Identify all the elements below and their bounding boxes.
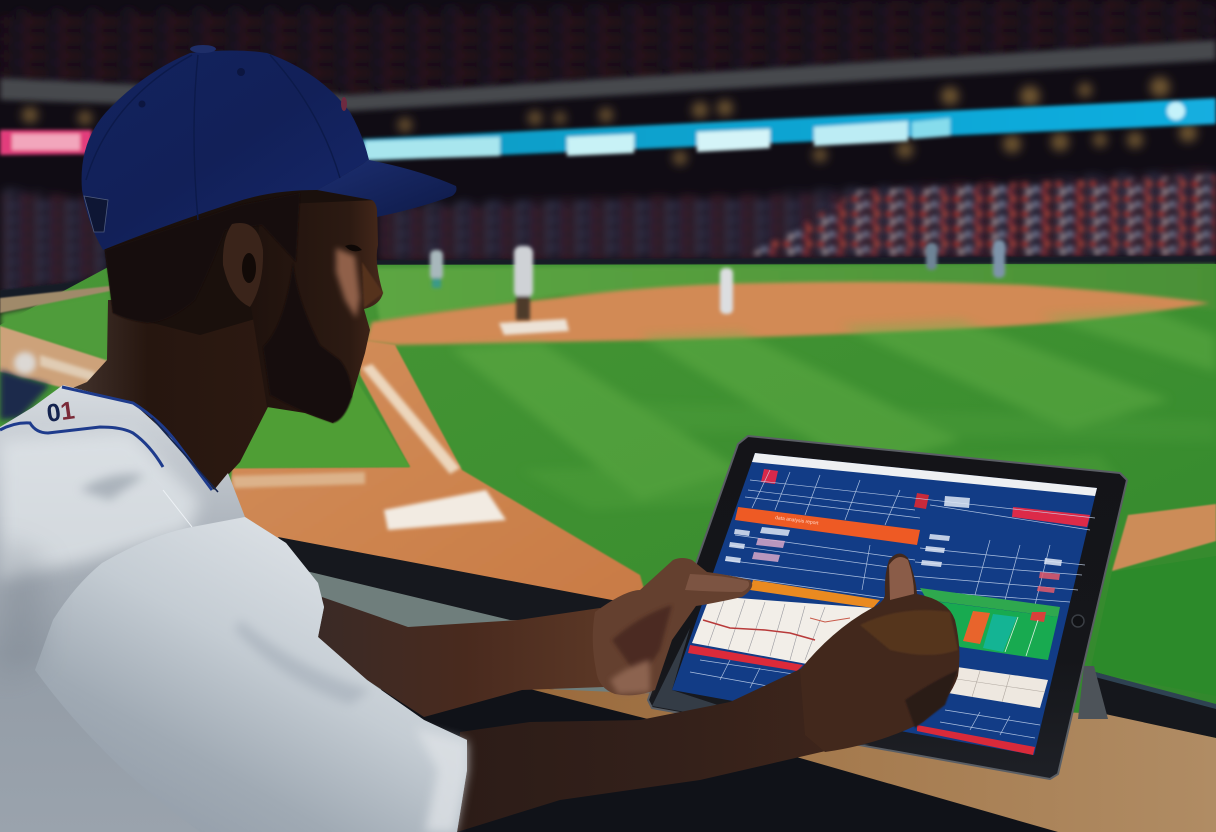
blurred fielders xyxy=(430,240,1005,320)
jersey shirt xyxy=(0,385,467,832)
dirt infield and baselines xyxy=(0,282,1216,610)
ear xyxy=(223,223,263,307)
collar piping xyxy=(62,387,212,490)
warm stadium lights xyxy=(22,77,1197,165)
tablet xyxy=(648,436,1127,779)
right arm xyxy=(457,663,830,832)
eye xyxy=(345,245,362,251)
outfield wall xyxy=(0,256,1216,302)
tablet bezel xyxy=(648,436,1127,779)
neck xyxy=(63,300,305,490)
left arm xyxy=(318,597,612,717)
upper crowd xyxy=(0,0,1216,96)
wooden desk xyxy=(526,688,1216,832)
sleeve xyxy=(35,517,467,832)
left field grass xyxy=(0,290,110,362)
screen orange header xyxy=(735,507,920,545)
cap logo clasp xyxy=(84,196,108,232)
bases and chalk lines xyxy=(40,319,569,530)
chest highlight xyxy=(0,432,200,580)
beard xyxy=(263,262,352,423)
outfield grass xyxy=(370,264,1216,322)
lower crowd seating xyxy=(380,170,1216,262)
tablet stand xyxy=(1078,666,1108,719)
screen red tag xyxy=(1012,507,1090,527)
screen map trend line xyxy=(703,620,815,640)
LED ribbon board xyxy=(0,98,1216,161)
cheek highlight xyxy=(336,248,360,318)
baseball cap xyxy=(82,45,457,250)
screen second orange bar xyxy=(750,580,880,608)
cap crown xyxy=(82,50,369,250)
shoulder seam xyxy=(163,490,192,527)
lower right grass beyond rail xyxy=(1090,556,1216,696)
cap red logo hint xyxy=(341,97,347,111)
camera ring xyxy=(1072,615,1084,627)
playing field xyxy=(0,240,1216,832)
screen data lines xyxy=(690,470,1095,738)
tablet screen: data analysis report xyxy=(775,515,819,527)
screen red footer left xyxy=(688,645,803,671)
jersey body xyxy=(0,385,467,832)
right hand xyxy=(800,553,959,752)
left hand xyxy=(593,558,752,695)
left spectators blur xyxy=(0,352,50,420)
tablet screen xyxy=(672,453,1097,755)
screen green panels xyxy=(925,600,1058,660)
screen text blocks xyxy=(725,496,1062,593)
fold shadows xyxy=(235,620,370,705)
cap button xyxy=(190,45,216,53)
screen red footer right xyxy=(917,725,1035,755)
upper deck fascia xyxy=(0,40,1216,111)
cap eyelets xyxy=(237,68,245,76)
hair xyxy=(105,193,300,323)
screen top-left red button xyxy=(761,469,778,484)
skull base under cap xyxy=(104,186,378,335)
dark lower wall xyxy=(360,686,1070,832)
inner ear shadow xyxy=(242,253,256,283)
mowing stripes xyxy=(450,310,1216,510)
cap brim xyxy=(317,160,456,217)
cap seams xyxy=(86,55,340,220)
left foul grass patch xyxy=(232,378,410,468)
viewing box rail and ledge xyxy=(278,537,1216,738)
nose shading xyxy=(362,262,383,308)
face xyxy=(250,200,383,423)
screen green header xyxy=(920,588,1060,617)
stadium stands background xyxy=(0,0,1216,302)
sleeve cuff highlight xyxy=(415,728,467,832)
screen lower white table xyxy=(948,667,1048,708)
jersey number: 01 xyxy=(45,396,76,428)
screen white map xyxy=(692,596,873,664)
